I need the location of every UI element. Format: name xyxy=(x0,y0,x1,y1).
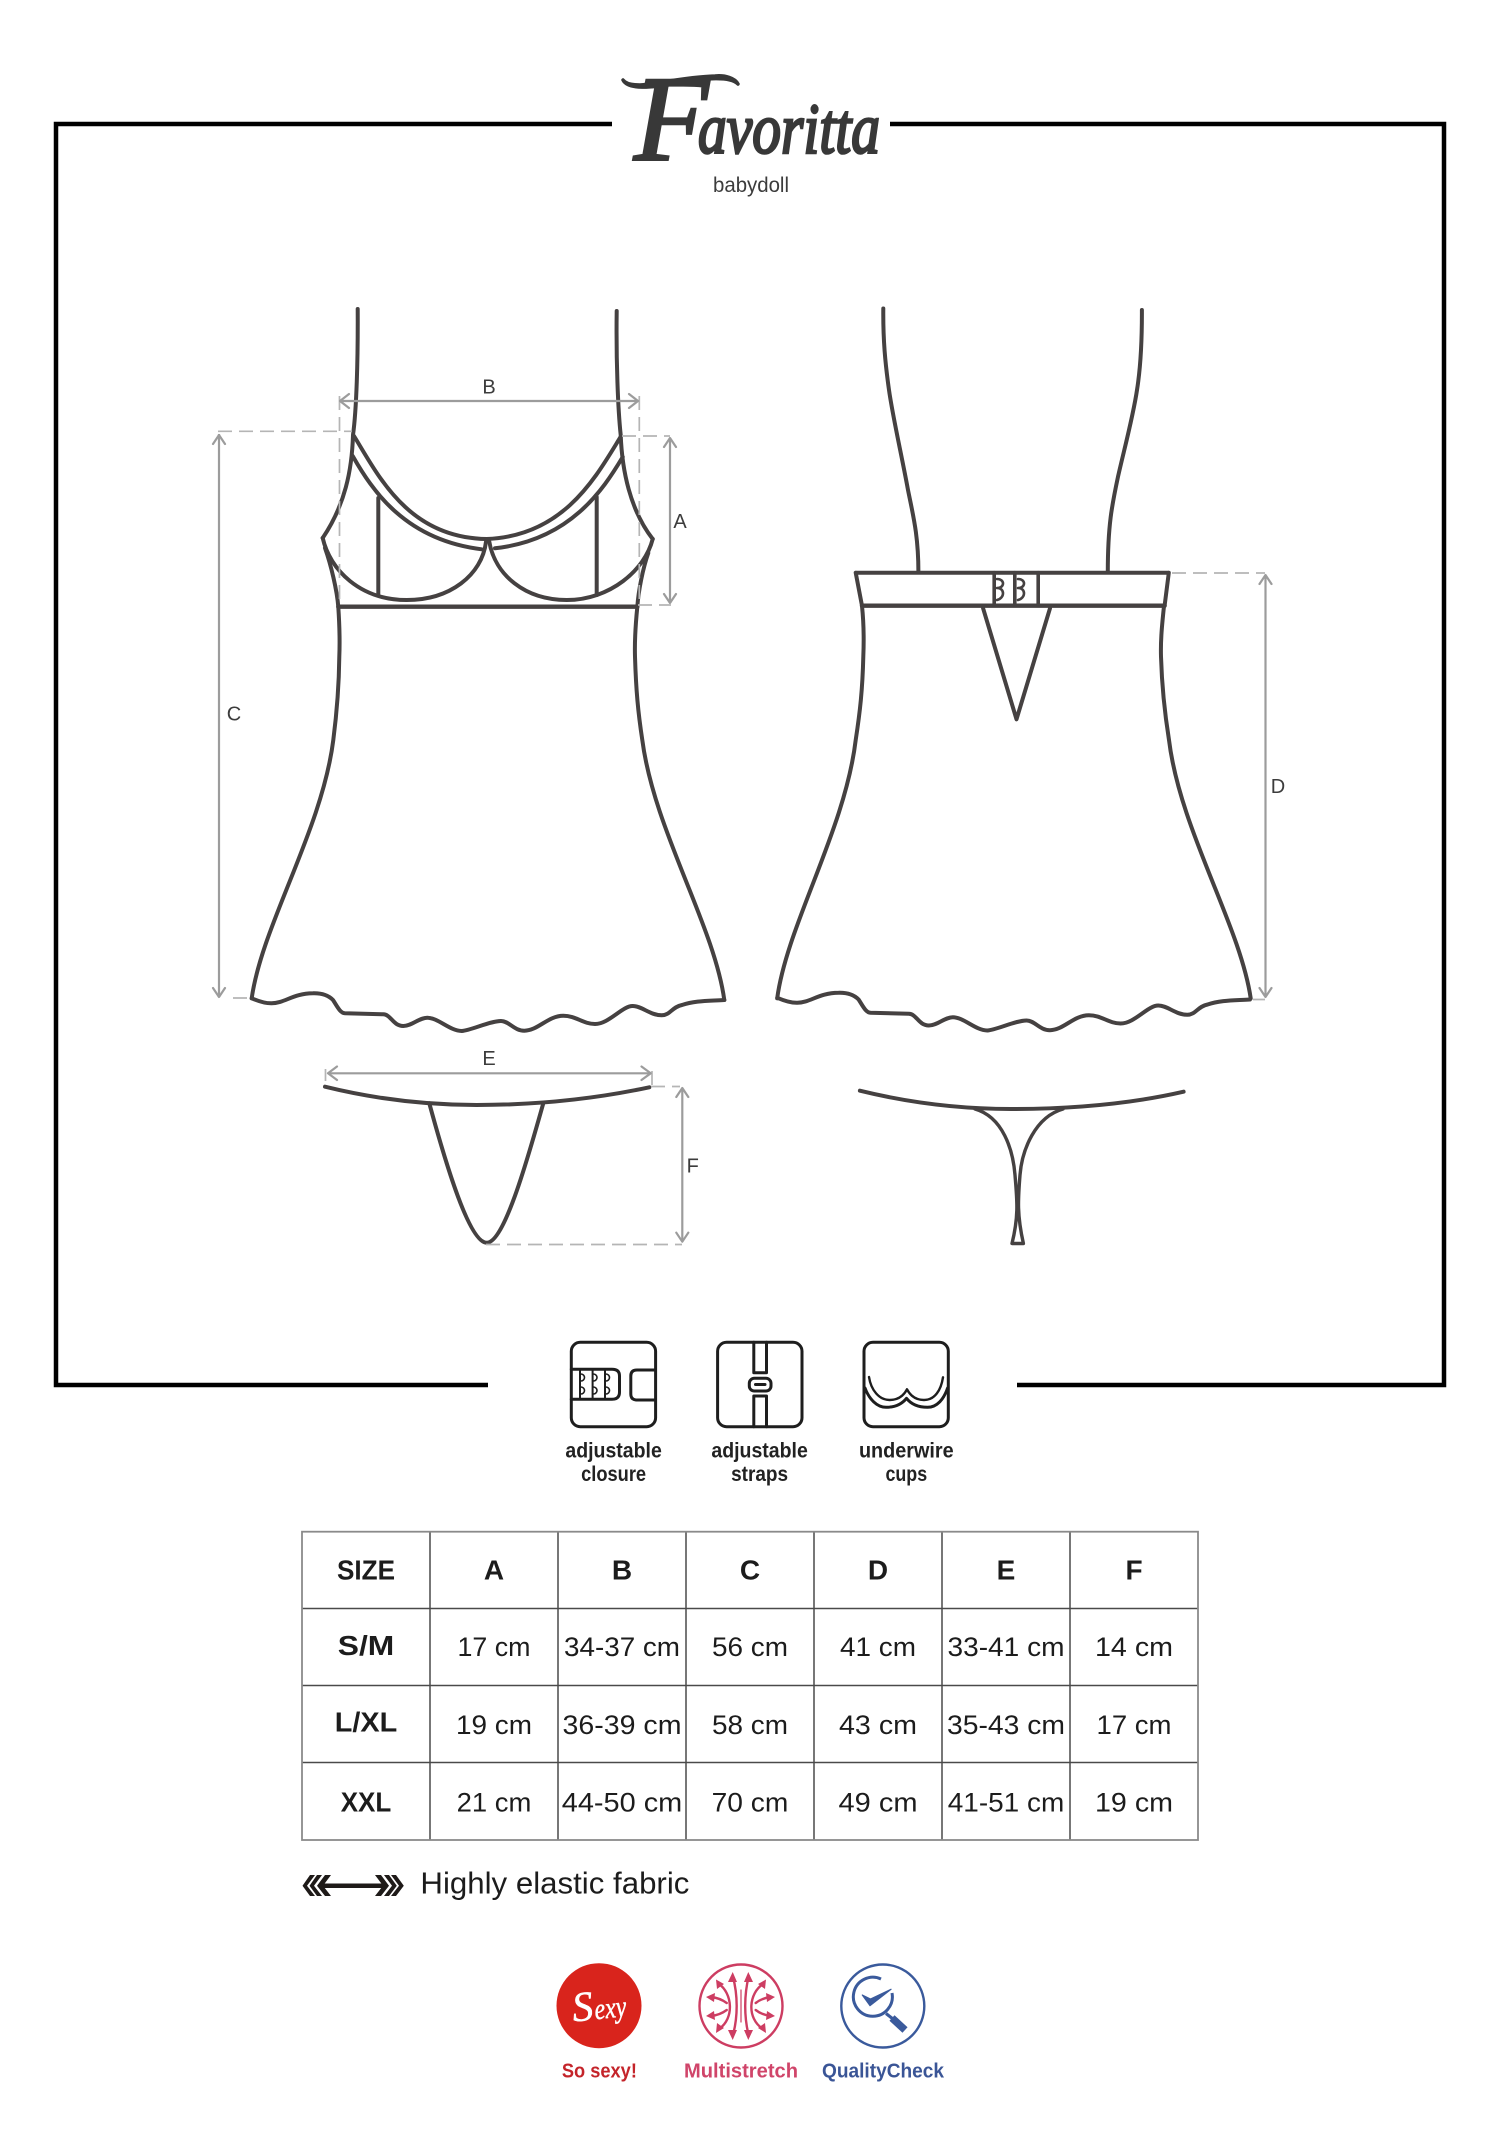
table row L/XL: L/XL xyxy=(335,1707,397,1738)
badge: multistretch: Multistretch xyxy=(684,2060,798,2082)
table header row: A xyxy=(484,1554,504,1585)
dimension F: F xyxy=(687,1156,699,1178)
table row XXL: 19 cm xyxy=(1095,1788,1173,1818)
table row S/M: 56 cm xyxy=(712,1632,788,1662)
table row S/M: 41 cm xyxy=(840,1632,916,1662)
table row L/XL xyxy=(335,1707,1172,1740)
dimension C: C xyxy=(227,704,241,726)
icon: adjustable closure: closure xyxy=(581,1462,646,1486)
table row L/XL: 35-43 cm xyxy=(947,1710,1065,1740)
table header row: B xyxy=(612,1554,632,1585)
table row L/XL: 36-39 cm xyxy=(562,1710,682,1740)
badge: so sexy: So sexy! xyxy=(562,2060,637,2082)
icon: underwire cups: underwire xyxy=(859,1438,954,1462)
logo: Favoritta: avoritta xyxy=(698,89,880,169)
badge: quality check xyxy=(822,1964,945,2082)
table row XXL: 44-50 cm xyxy=(562,1788,682,1818)
front thong drawing xyxy=(325,1087,649,1243)
dimension A: A xyxy=(673,511,687,533)
badge: so sexy: S xyxy=(570,1984,595,2032)
size table xyxy=(302,1532,1198,1840)
table row XXL: 70 cm xyxy=(712,1788,788,1818)
table row L/XL: 19 cm xyxy=(456,1710,532,1740)
icon: adjustable straps xyxy=(711,1342,808,1486)
dimension A xyxy=(622,436,687,605)
back closure hooks xyxy=(994,573,1038,606)
back babydoll drawing xyxy=(777,308,1251,1030)
front hem xyxy=(252,993,724,1031)
badge: so sexy: exy xyxy=(593,1990,628,2026)
text: highly elastic fabric: Highly elastic fabric xyxy=(420,1865,689,1900)
table row S/M: 14 cm xyxy=(1095,1632,1173,1662)
back hem xyxy=(777,993,1250,1030)
dimension D: D xyxy=(1271,776,1285,798)
dimension F xyxy=(486,1086,699,1244)
dimension E xyxy=(326,1048,652,1085)
badge: so sexy xyxy=(556,1963,642,2082)
table row L/XL: 58 cm xyxy=(712,1710,788,1740)
dimension D xyxy=(1172,573,1285,1000)
table row S/M: S/M xyxy=(338,1630,394,1661)
dimension C xyxy=(213,431,352,998)
logo: Favoritta xyxy=(623,52,880,187)
table header row: C xyxy=(740,1554,760,1585)
table row XXL: 49 cm xyxy=(838,1788,918,1818)
table header row: E xyxy=(997,1554,1015,1585)
outer frame xyxy=(56,124,1444,1385)
dimension B xyxy=(340,376,639,606)
table row S/M: 33-41 cm xyxy=(948,1632,1064,1662)
icon: adjustable straps: adjustable xyxy=(711,1438,808,1462)
badge: quality check: QualityCheck xyxy=(822,2060,945,2082)
table header row: F xyxy=(1125,1554,1143,1585)
icon: adjustable straps: straps xyxy=(731,1462,788,1486)
table row XXL: XXL xyxy=(341,1787,391,1818)
front babydoll drawing xyxy=(252,309,724,1031)
dimension B: B xyxy=(482,376,496,398)
icon: adjustable closure xyxy=(565,1342,662,1486)
back thong drawing xyxy=(860,1091,1184,1244)
table row S/M: 34-37 cm xyxy=(564,1632,680,1662)
table row S/M xyxy=(338,1630,1173,1662)
table row S/M: 17 cm xyxy=(458,1632,530,1662)
icon: adjustable closure: adjustable xyxy=(565,1438,662,1462)
icon: elastic fabric double arrow xyxy=(302,1875,404,1896)
icon: underwire cups xyxy=(859,1342,954,1486)
table row L/XL: 17 cm xyxy=(1096,1710,1172,1740)
table header row xyxy=(337,1554,1143,1585)
table row L/XL: 43 cm xyxy=(839,1710,917,1740)
table header row: D xyxy=(868,1554,888,1585)
table row XXL xyxy=(341,1787,1173,1818)
table row XXL: 21 cm xyxy=(457,1788,531,1818)
table row XXL: 41-51 cm xyxy=(948,1788,1064,1818)
badge: multistretch xyxy=(684,1964,798,2082)
icon: underwire cups: cups xyxy=(885,1462,927,1486)
dimension E: E xyxy=(482,1048,496,1070)
subtitle: babydoll: babydoll xyxy=(713,174,789,197)
table header row: SIZE xyxy=(337,1554,395,1585)
logo: Favoritta: F xyxy=(633,52,710,187)
